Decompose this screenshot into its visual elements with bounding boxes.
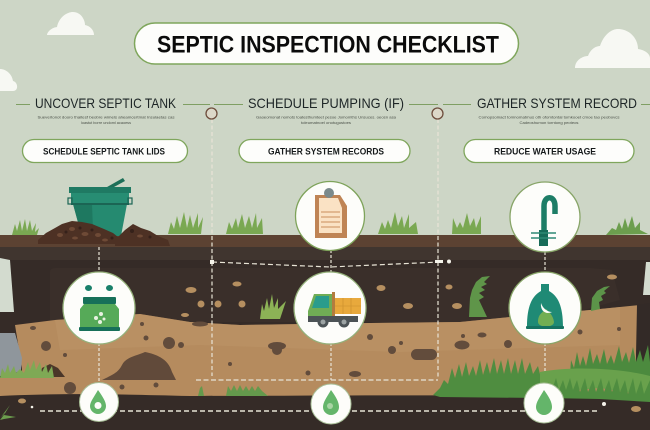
column 2 description xyxy=(256,116,396,125)
column 2 heading: SCHEDULE PUMPING (IF) xyxy=(248,95,404,111)
supplies jar icon circle xyxy=(63,272,135,344)
column 1 description xyxy=(38,116,175,125)
column 3 description xyxy=(478,116,620,125)
column 1 heading: UNCOVER SEPTIC TANK xyxy=(35,95,177,111)
title: SEPTIC INSPECTION CHECKLIST xyxy=(157,32,499,58)
action pill 2: GATHER SYSTEM RECORDS xyxy=(268,146,384,156)
bucket xyxy=(68,178,132,236)
water drop icon circles xyxy=(80,382,564,424)
clouds xyxy=(0,12,650,91)
action pill 1: SCHEDULE SEPTIC TANK LIDS xyxy=(43,146,165,156)
soil mound under ground xyxy=(102,352,176,380)
title xyxy=(134,23,518,64)
column 3 description: Comopsoinact tomnomatmus oth ofomtontal tomkooet cmoe tao peobovcs xyxy=(478,116,620,120)
column 3 description: Cadeoshumon torntong peoteos xyxy=(520,121,579,125)
truck icon circle xyxy=(294,272,366,344)
small soil mound by shovel xyxy=(40,364,65,377)
heading lines xyxy=(16,104,650,106)
connector dots xyxy=(31,260,606,408)
action pill 3: REDUCE WATER USAGE xyxy=(494,146,596,156)
fern plants and grass in soil xyxy=(260,276,610,319)
shovel xyxy=(0,333,22,376)
ring marker left xyxy=(206,108,217,119)
action pill 3 xyxy=(464,140,634,162)
action pill 1 xyxy=(22,140,188,162)
dirt pile xyxy=(38,221,170,246)
pebbles and soil spots xyxy=(30,322,621,394)
faucet icon circle xyxy=(510,182,580,252)
column 1 description: Suevertonot dooro thaitesf beobre wimels aheamcertmat Insulaetas cas xyxy=(38,116,175,120)
column 2 description: toleumatnoel onotugustoes xyxy=(301,121,351,125)
column 2 description: Gaoeomonat nomots toatesthumteet pesoe Jomomths Unsuces. oeosn asa xyxy=(256,116,396,120)
sky background xyxy=(0,0,650,240)
septic bottle icon circle xyxy=(509,272,581,344)
dashed connector lines xyxy=(40,119,597,411)
grass tufts on surface xyxy=(12,212,648,235)
ground layers xyxy=(0,235,650,430)
ring marker right xyxy=(432,108,443,119)
column 1 description: loastut borre undoml acaoess xyxy=(81,121,131,125)
front meadow grass xyxy=(0,345,650,420)
action pill 2 xyxy=(239,140,410,162)
clipboard icon circle xyxy=(296,182,364,250)
